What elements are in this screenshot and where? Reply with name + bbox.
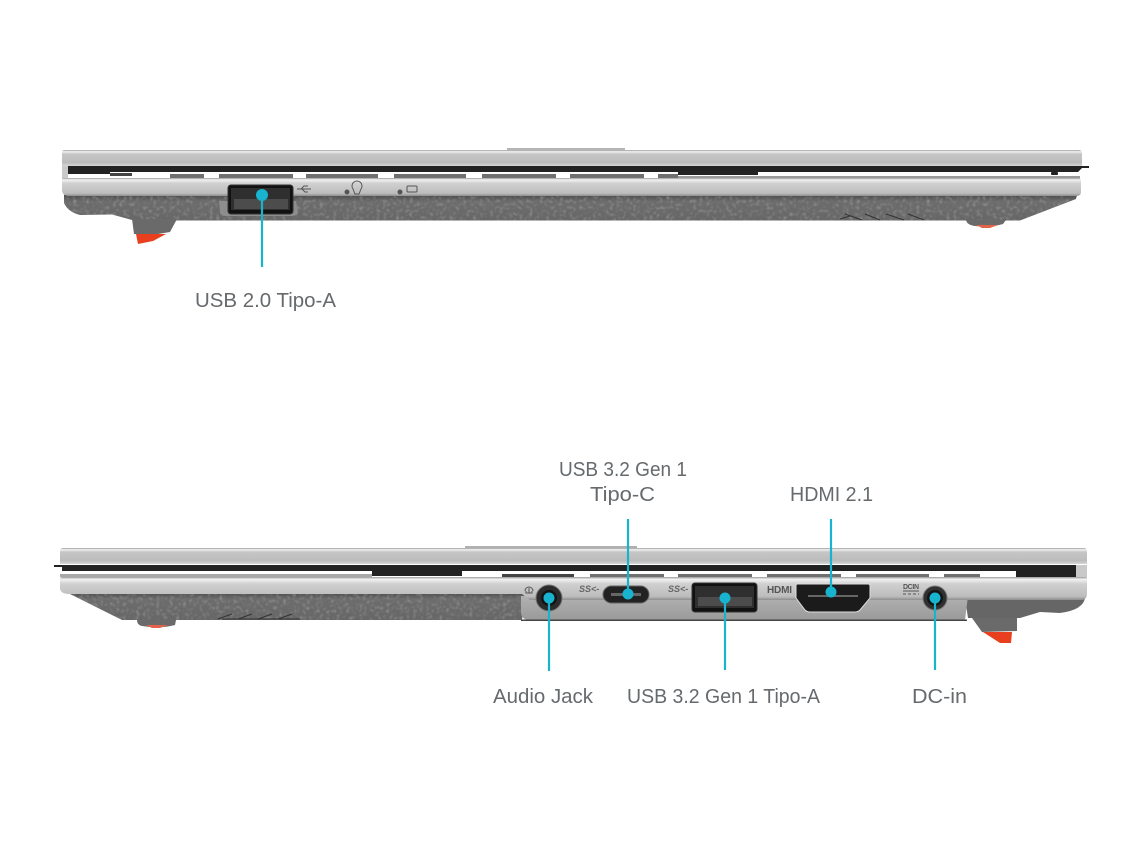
port plate — [521, 596, 968, 620]
lid — [60, 548, 1087, 564]
connector: audio jack — [544, 592, 554, 671]
icon: headset — [525, 587, 533, 593]
USB recess — [219, 201, 298, 216]
icon: DC-in: DCIN — [903, 584, 919, 591]
icon: battery indicator — [398, 186, 417, 194]
lid hump — [465, 546, 637, 549]
left foot — [137, 620, 176, 628]
left foot — [132, 219, 177, 244]
label: Audio Jack: Audio Jack — [493, 686, 594, 708]
lid — [62, 150, 1082, 166]
icon: SS usb: SS<- — [579, 584, 599, 594]
base front — [62, 178, 1081, 196]
connector: USB 2.0 — [256, 189, 268, 267]
connector: USB-C — [622, 519, 634, 600]
label: DC-in: DC-in — [912, 686, 967, 708]
icon: power indicator — [344, 181, 362, 194]
label: USB 3.2 Gen 1 Tipo-A: USB 3.2 Gen 1 Tipo-A — [627, 686, 821, 708]
label: USB 3.2 Gen 1 Tipo-C: USB 3.2 Gen 1 — [559, 459, 687, 481]
connector: HDMI — [826, 519, 836, 598]
lid hump — [507, 148, 625, 151]
vent slots — [218, 614, 300, 619]
DC-in port — [923, 586, 947, 610]
laptop: right side view — [54, 546, 1087, 643]
label: USB 3.2 Gen 1 Tipo-C: Tipo-C — [590, 484, 655, 506]
underside right — [965, 598, 1085, 618]
right foot — [966, 220, 1006, 228]
base front — [60, 577, 1087, 600]
label: USB 3.2 Gen 1 Tipo-C — [559, 459, 687, 506]
USB-A port — [692, 583, 757, 612]
hinge gap — [54, 565, 1076, 571]
icon: usb symbol — [297, 186, 311, 192]
vent slots — [840, 214, 924, 220]
connector: USB-A — [720, 592, 730, 670]
HDMI port — [796, 584, 870, 612]
underside — [64, 195, 1077, 220]
underside texture — [64, 195, 1077, 220]
icon: SS usb: SS<- — [668, 584, 688, 594]
label: HDMI 2.1: HDMI 2.1 — [790, 484, 873, 506]
right foot — [972, 618, 1017, 643]
hinge gap — [68, 166, 1089, 172]
keyboard strip — [60, 565, 1087, 579]
audio jack port — [536, 585, 562, 611]
laptop: left side view — [62, 148, 1089, 244]
keyboard strip — [62, 166, 1080, 179]
USB 2.0 port — [228, 185, 293, 214]
USB-C port — [603, 586, 649, 603]
underside left — [66, 592, 525, 620]
label: USB 2.0 Tipo-A: USB 2.0 Tipo-A — [195, 290, 337, 312]
underside texture — [66, 592, 525, 620]
connector: DC-in — [930, 592, 940, 670]
icon: HDMI logo: HDMI — [767, 585, 792, 596]
